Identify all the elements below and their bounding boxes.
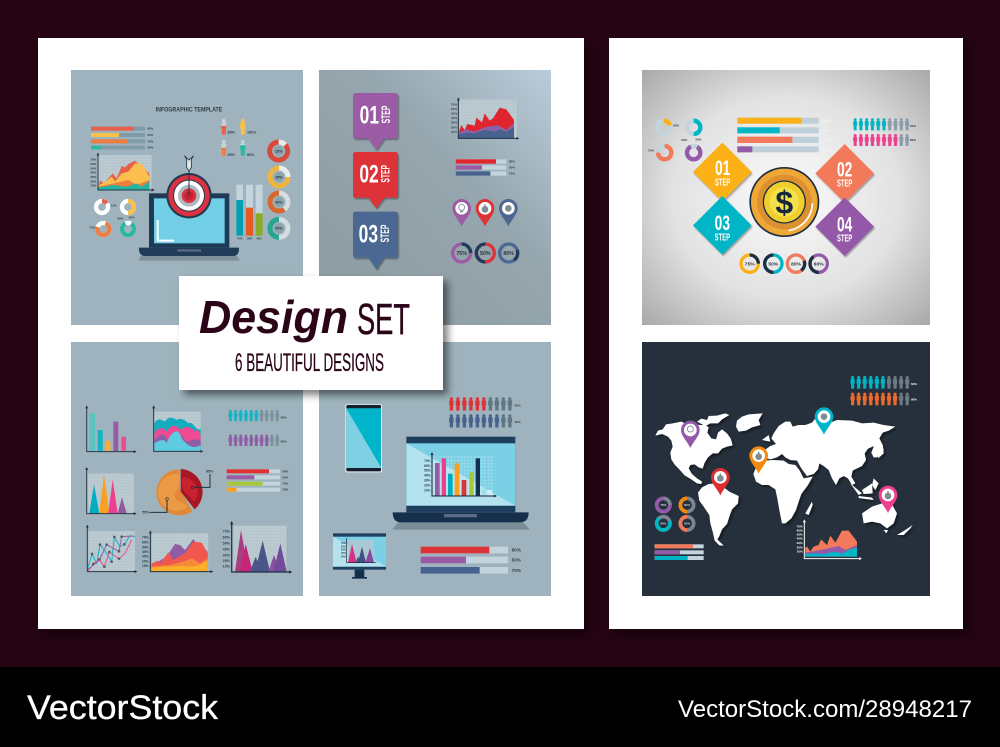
area chart: 50% <box>797 532 803 536</box>
step 03 marker: 03 <box>359 220 378 248</box>
layered area chart: 50% <box>142 545 149 549</box>
percent donuts <box>741 253 827 275</box>
icon: target with arrow <box>166 156 212 218</box>
pie chart <box>142 469 214 515</box>
step 04 diamond <box>815 197 874 256</box>
panel: devices <box>319 342 551 596</box>
people row: teal: 60% <box>911 382 917 386</box>
icon: laptop with bar chart <box>392 437 530 530</box>
area chart: 30% <box>797 541 803 545</box>
step 02 marker <box>353 152 398 208</box>
small donuts: 15% <box>111 204 117 208</box>
step 02 marker: STEP <box>378 165 392 183</box>
panel: four steps with coin <box>642 70 930 325</box>
step 03 diamond: 03 <box>715 210 730 235</box>
area chart <box>90 155 153 190</box>
step 04 diamond: STEP <box>837 234 853 245</box>
donuts: 50% <box>684 521 690 525</box>
step 03 marker: STEP <box>378 225 392 242</box>
step 01 marker: STEP <box>379 106 393 123</box>
people row: teal <box>853 118 916 130</box>
peaks chart: 70% <box>223 530 231 534</box>
area chart: 10% <box>797 550 803 554</box>
map pin: north america <box>681 421 700 448</box>
wave area chart <box>154 407 201 451</box>
area chart: 10% <box>90 184 97 188</box>
layered area chart <box>142 532 211 572</box>
icon: laptop with bar chart: 30% <box>424 478 431 482</box>
peaks chart: 10% <box>223 565 231 569</box>
small donuts: 75% <box>648 149 654 153</box>
icon: dollar coin: $ <box>775 184 793 220</box>
horizontal bars: 30% <box>282 488 289 492</box>
area chart: 40% <box>90 171 97 175</box>
icon: desktop monitor: 60% <box>341 546 347 548</box>
layered area chart: 40% <box>142 550 149 554</box>
people percentages: 60% <box>228 153 236 157</box>
area chart: 30% <box>90 175 97 179</box>
donuts: 75% <box>660 503 667 507</box>
bar chart <box>87 407 135 452</box>
layered area chart: 70% <box>142 536 149 540</box>
map pin: russia <box>815 407 833 435</box>
icon: desktop monitor: 30% <box>341 556 347 558</box>
step 01 marker: 01 <box>360 101 379 129</box>
horizontal bars <box>227 469 289 492</box>
horizontal bars <box>421 547 522 574</box>
step 01 diamond: STEP <box>715 177 731 188</box>
map pin: australia <box>879 486 897 513</box>
icon: desktop monitor: 40% <box>341 552 347 555</box>
banner heading: design: Design <box>199 291 348 343</box>
icon: laptop with bar chart: 10% <box>424 488 431 492</box>
horizontal bars: 80% <box>822 118 831 123</box>
area chart: 70% <box>797 524 803 528</box>
peaks chart: 30% <box>223 553 231 557</box>
area chart: 40% <box>451 116 457 120</box>
people row: purple <box>228 435 287 446</box>
panel: target and laptop infographic <box>71 70 303 325</box>
people percentages <box>221 119 257 157</box>
small donuts: 50% <box>129 215 135 219</box>
world map <box>655 413 913 546</box>
step 02 diamond <box>815 144 874 203</box>
footer bar <box>0 667 1000 747</box>
left white card <box>38 38 584 629</box>
icon: laptop with bar chart: 70% <box>424 459 431 463</box>
area chart: 70% <box>451 103 457 107</box>
area chart: 50% <box>90 166 97 170</box>
small donuts: 50% <box>695 137 702 141</box>
small donuts: 20% <box>673 124 679 128</box>
people row: teal <box>851 376 917 389</box>
horizontal bars: 50% <box>282 475 289 479</box>
people row: purple: 80% <box>281 439 287 443</box>
small donuts <box>89 201 136 237</box>
icon: laptop with bar chart: 20% <box>424 483 431 487</box>
layered area chart: 20% <box>142 559 149 563</box>
people percentages: 100% <box>247 130 257 134</box>
step 01 diamond: 01 <box>715 155 730 180</box>
peaks chart: 60% <box>223 535 231 539</box>
footer: brand: VectorStock <box>27 689 219 727</box>
map pin: south america <box>711 468 730 495</box>
percent donuts: 50% <box>768 262 779 268</box>
people percentages: 80% <box>228 130 236 134</box>
icon: desktop monitor: 50% <box>341 550 347 552</box>
icon: laptop with bar chart: 50% <box>424 469 431 473</box>
big donuts column: 25% <box>275 175 283 179</box>
horizontal bars: 50% <box>509 166 515 170</box>
horizontal bars: 30% <box>147 146 154 150</box>
area chart: 20% <box>797 545 803 549</box>
vertical bars: 50% <box>247 237 253 241</box>
step 01 diamond <box>693 143 752 201</box>
big donuts column: 15% <box>275 149 283 153</box>
icon: phone <box>345 404 382 472</box>
step 02 diamond: STEP <box>837 179 853 190</box>
icon: laptop <box>138 193 240 261</box>
horizontal bars: 80% <box>512 548 522 553</box>
horizontal bars: 50% <box>147 133 154 137</box>
horizontal bars <box>91 127 154 150</box>
big donuts column <box>270 142 288 237</box>
people percentages: 80% <box>247 153 255 157</box>
area chart: 30% <box>451 121 457 125</box>
vertical bars: 70% <box>237 237 243 241</box>
area chart: 60% <box>451 107 457 111</box>
step 02 marker: 02 <box>359 161 379 189</box>
area chart <box>451 99 517 138</box>
big donuts column: 50% <box>275 227 283 231</box>
horizontal bars: 70% <box>147 139 154 143</box>
people row: teal: 60% <box>910 124 916 128</box>
horizontal bars: 70% <box>282 482 289 486</box>
big donuts column: 40% <box>275 200 283 204</box>
step 03 diamond: STEP <box>715 232 730 243</box>
banner subtitle: 6 BEAUTIFUL DESIGNS <box>235 349 384 377</box>
horizontal bars <box>456 159 515 176</box>
banner heading: set: SET <box>357 295 410 344</box>
vertical bars <box>236 185 263 241</box>
people row: pink <box>853 134 916 146</box>
peaks chart: 40% <box>223 547 231 551</box>
small donuts: 90% <box>681 138 688 142</box>
area chart: 60% <box>797 528 803 532</box>
icon: desktop monitor <box>333 533 386 579</box>
people row: blue: 80% <box>515 420 521 424</box>
horizontal bars: 80% <box>147 127 154 131</box>
area chart: 70% <box>90 158 97 162</box>
percent donuts: 60% <box>814 262 824 268</box>
step 04 diamond: 04 <box>837 211 852 236</box>
icon: laptop with bar chart: 40% <box>424 473 431 477</box>
area chart: 10% <box>451 130 457 134</box>
banner: design set <box>179 276 443 390</box>
peaks chart: 50% <box>223 541 231 545</box>
area chart: 50% <box>451 111 457 115</box>
icon: dollar coin <box>749 167 819 237</box>
horizontal bars <box>655 544 704 560</box>
step 03 marker <box>353 212 398 269</box>
people row: red: 60% <box>515 403 521 407</box>
donuts: 60% <box>684 503 690 507</box>
right white card <box>609 38 963 629</box>
donuts: 80% <box>660 521 667 525</box>
horizontal bars: 30% <box>822 147 831 152</box>
panel: world map <box>642 342 930 596</box>
percent donuts: 50% <box>480 251 491 257</box>
area chart: 40% <box>797 537 803 541</box>
heading: infographic template: INFOGRAPHIC TEMPLATE <box>156 107 222 114</box>
people row: red <box>449 397 521 411</box>
small donuts <box>648 121 703 162</box>
percent donuts <box>453 241 520 265</box>
peaks chart <box>223 523 290 572</box>
triangle chart <box>87 469 135 514</box>
pie chart: 55% <box>142 511 150 515</box>
layered area chart: 10% <box>142 564 149 568</box>
people row: teal <box>228 410 287 421</box>
location pins <box>452 199 518 226</box>
step 03 diamond <box>693 196 752 255</box>
horizontal bars: 70% <box>509 172 515 176</box>
percent donuts: 75% <box>745 262 755 268</box>
horizontal bars: 70% <box>512 568 522 573</box>
small donuts: 90% <box>117 216 124 220</box>
people row: pink: 80% <box>910 138 916 142</box>
horizontal bars: 80% <box>509 160 515 164</box>
people row: orange <box>851 392 917 405</box>
step 02 diamond: 02 <box>837 156 852 181</box>
vertical bars: 40% <box>256 237 262 241</box>
horizontal bars: 70% <box>822 137 831 142</box>
peaks chart: 20% <box>223 559 231 563</box>
percent donuts: 80% <box>503 251 514 257</box>
percent donuts: 80% <box>791 262 802 268</box>
people row: teal: 60% <box>281 415 287 419</box>
footer: image id: VectorStock.com/28948217 <box>678 696 972 723</box>
small donuts: 75% <box>89 226 96 230</box>
diamond steps <box>693 143 874 256</box>
area chart <box>797 521 860 559</box>
donuts <box>655 498 694 532</box>
people row: blue <box>449 414 521 428</box>
panel: step markers <box>319 70 551 325</box>
panel: charts collection <box>71 342 303 596</box>
horizontal bars: 50% <box>512 558 522 563</box>
horizontal bars <box>737 118 831 152</box>
area chart: 60% <box>90 162 97 166</box>
horizontal bars: 50% <box>822 128 831 133</box>
percent donuts: 75% <box>456 251 467 257</box>
pie chart: 65% <box>206 469 214 473</box>
horizontal bars: 80% <box>282 469 289 473</box>
people row: orange: 80% <box>911 398 917 402</box>
icon: laptop with bar chart: 60% <box>424 464 431 468</box>
icon: desktop monitor: 70% <box>341 543 347 545</box>
area chart: 20% <box>451 125 457 129</box>
layered area chart: 30% <box>142 555 149 559</box>
step 01 marker <box>353 93 398 150</box>
map pin: africa <box>749 446 768 474</box>
layered area chart: 60% <box>142 540 149 544</box>
area chart: 20% <box>90 179 97 183</box>
line chart <box>87 527 135 572</box>
